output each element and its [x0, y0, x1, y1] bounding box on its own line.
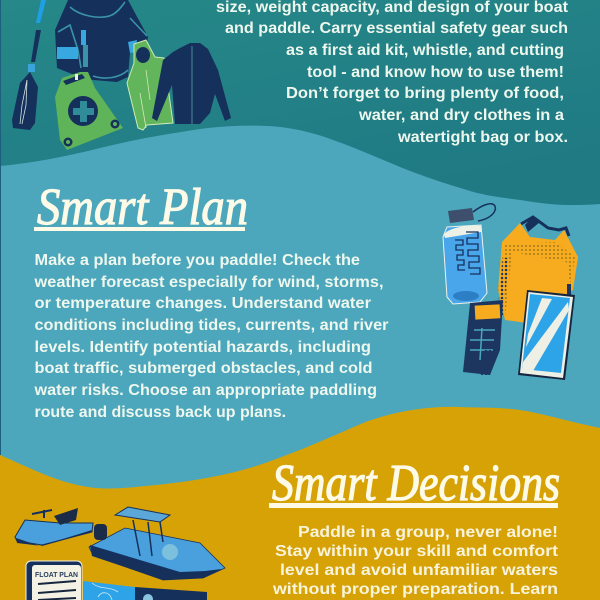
left edge strip [0, 0, 1, 455]
icon: green rain jacket [127, 40, 173, 130]
body text: gear: watertight bag or box. [397, 129, 568, 146]
body text: decisions [272, 524, 559, 598]
body text: decisions: Paddle in a group, never alone! [298, 524, 558, 541]
body text: gear: and paddle. Carry essential safety gear such [225, 20, 568, 37]
body text: gear: water, and dry clothes in a [358, 107, 564, 124]
icon: center console boat [89, 507, 225, 580]
panel: smart decisions background wave [0, 407, 600, 600]
icon: paddling route map [83, 581, 207, 600]
heading: Smart Plan: Smart Plan [37, 179, 248, 236]
body text: gear [216, 0, 568, 146]
icon: life vest [55, 0, 148, 82]
body text: plan: levels. Identify potential hazards, including [34, 339, 371, 356]
icon: jet ski [15, 508, 93, 546]
icon: float plan clipboard [26, 561, 82, 600]
body text: gear: tool - and know how to use them! [307, 64, 564, 81]
body text: gear: as a first aid kit, whistle, and cutting [286, 42, 564, 59]
icon: water bottle [443, 204, 495, 304]
body text: plan: conditions including tides, currents, and river [34, 317, 388, 334]
icon: float plan clipboard: FLOAT PLAN [35, 570, 78, 579]
icon: paddle [12, 0, 46, 130]
body text: plan: Make a plan before you paddle! Check the [34, 252, 360, 269]
body text: decisions: without proper preparation. Learn [272, 581, 558, 598]
icon: first aid dry bag [55, 72, 123, 150]
body text: plan: boat traffic, submerged obstacles, and cold [34, 360, 372, 377]
body text: plan: or temperature changes. Understand water [34, 295, 371, 312]
body text: plan: route and discuss back up plans. [34, 404, 286, 421]
icon: handheld radio [463, 300, 503, 375]
body text: plan: water risks. Choose an appropriate paddling [33, 382, 377, 399]
panel: gear section background wave [0, 0, 600, 205]
icon: navy jacket [152, 43, 231, 124]
body text: decisions: level and avoid unfamiliar waters [280, 562, 558, 579]
body text: plan [33, 252, 388, 421]
icon: smartphone [518, 290, 575, 380]
body text: gear: Don’t forget to bring plenty of food, [286, 85, 564, 102]
body text: plan: weather forecast especially for wind, storms, [33, 274, 383, 291]
icon: orange dry bag [497, 217, 578, 323]
body text: decisions: Stay within your skill and comfort [275, 543, 559, 560]
